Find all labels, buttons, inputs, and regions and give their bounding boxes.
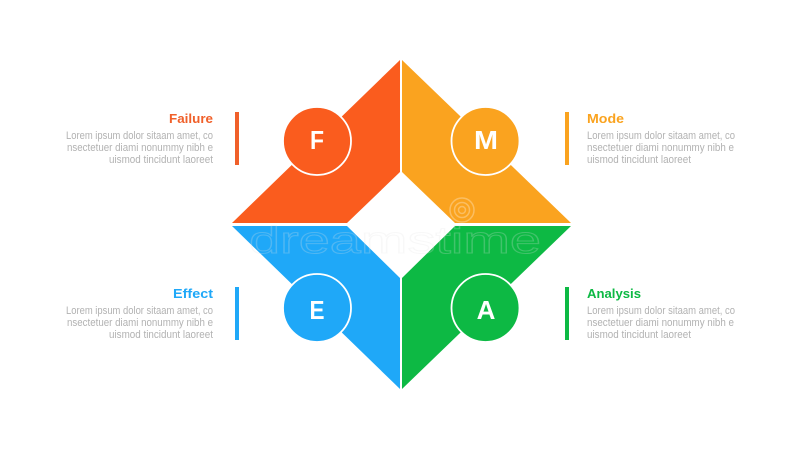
text block: failure: Failure — [169, 111, 213, 126]
text block: analysis: uismod tincidunt laoreet — [587, 329, 691, 341]
text block: effect — [66, 286, 214, 341]
text block: analysis: nsectetuer diami nonummy nibh e — [587, 317, 734, 329]
panel: analysis segment — [402, 226, 735, 389]
text block: mode: nsectetuer diami nonummy nibh e — [587, 142, 734, 154]
text block: effect: nsectetuer diami nonummy nibh e — [67, 317, 213, 329]
icon: F badge — [283, 107, 351, 175]
watermark wordmark: dreamstime — [249, 220, 541, 262]
shape: failure parallelogram — [232, 60, 400, 223]
watermark — [249, 198, 541, 262]
text block: analysis: Lorem ipsum dolor sitaam amet, co — [587, 305, 735, 317]
bar: effect accent — [235, 287, 239, 340]
text block: failure: Lorem ipsum dolor sitaam amet, co — [66, 130, 213, 142]
panel: failure segment — [66, 60, 400, 223]
icon: A badge — [452, 274, 520, 342]
bar: failure accent — [235, 112, 239, 165]
icon: F badge: F — [310, 125, 324, 155]
text block: failure — [66, 111, 213, 166]
shape: effect parallelogram — [232, 226, 400, 389]
text block: mode: uismod tincidunt laoreet — [587, 154, 691, 166]
icon: E badge — [283, 274, 351, 342]
text block: analysis — [587, 286, 735, 341]
bar: mode accent — [565, 112, 569, 165]
text block: effect: Lorem ipsum dolor sitaam amet, co — [66, 305, 213, 317]
watermark spiral icon — [450, 198, 474, 222]
panel: mode segment — [402, 60, 735, 223]
icon: A badge: A — [477, 295, 496, 325]
icon: M badge: M — [474, 125, 498, 155]
text block: failure: nsectetuer diami nonummy nibh e — [67, 142, 213, 154]
shape: mode parallelogram — [402, 60, 571, 223]
text block: mode: Lorem ipsum dolor sitaam amet, co — [587, 130, 735, 142]
panel: effect segment — [66, 226, 400, 389]
text block: analysis: Analysis — [587, 286, 641, 301]
text block: mode: Mode — [587, 111, 624, 126]
text block: effect: Effect — [173, 286, 214, 301]
shape: analysis parallelogram — [402, 226, 571, 389]
icon: M badge — [452, 107, 520, 175]
bar: analysis accent — [565, 287, 569, 340]
text block: effect: uismod tincidunt laoreet — [109, 329, 213, 341]
icon: E badge: E — [310, 295, 324, 325]
text block: mode — [587, 111, 735, 166]
text block: failure: uismod tincidunt laoreet — [109, 154, 213, 166]
